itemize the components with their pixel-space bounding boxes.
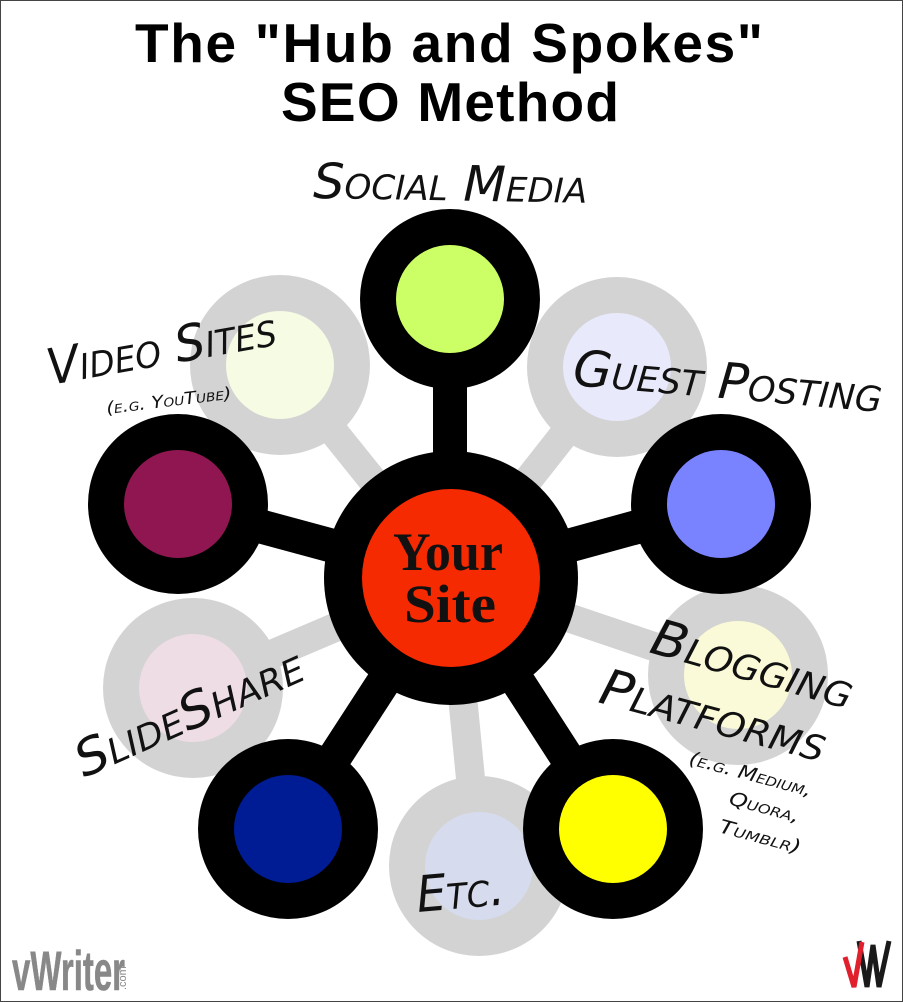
faded node: blogging platforms	[648, 585, 828, 765]
faded node: video sites	[190, 275, 370, 455]
faded spokes	[193, 365, 738, 866]
label: guest posting: Guest Posting	[571, 339, 885, 424]
hub: your site: Your	[393, 522, 503, 582]
main spokes	[178, 299, 721, 829]
title: SEO Method	[281, 71, 619, 133]
label: blogging platforms: Tumblr)	[717, 816, 804, 859]
label: blogging platforms: Platforms	[594, 658, 833, 774]
node: blogging platforms	[523, 739, 703, 919]
logo: vWriter: vWriter	[12, 939, 125, 1002]
hub: your site: Site	[404, 574, 496, 634]
label: blogging platforms	[594, 608, 861, 859]
hub: your site	[324, 451, 578, 705]
logo: vW mark	[845, 941, 889, 987]
title	[135, 12, 763, 133]
label: etc: Etc.	[414, 859, 507, 924]
faded node: etc	[389, 776, 569, 956]
faded node: slideshare	[103, 598, 283, 778]
label: slideshare: SlideShare	[65, 636, 314, 789]
logo: vWriter	[12, 939, 129, 1002]
logo: vWriter: .com	[117, 966, 129, 990]
label: blogging platforms: Blogging	[645, 608, 861, 721]
label: blogging platforms: Quora,	[727, 788, 802, 827]
label: social media: Social Media	[313, 153, 588, 215]
node: guest posting	[631, 414, 811, 594]
title: The "Hub and Spokes"	[135, 12, 763, 74]
label: blogging platforms: (e.g. Medium,	[687, 748, 814, 801]
label: video sites: (e.g. YouTube)	[105, 384, 233, 419]
node: slideshare	[198, 739, 378, 919]
faded node: guest posting	[527, 277, 707, 457]
node: social media	[360, 209, 540, 389]
node: video sites	[88, 414, 268, 594]
label: video sites: Video Sites	[42, 299, 281, 397]
